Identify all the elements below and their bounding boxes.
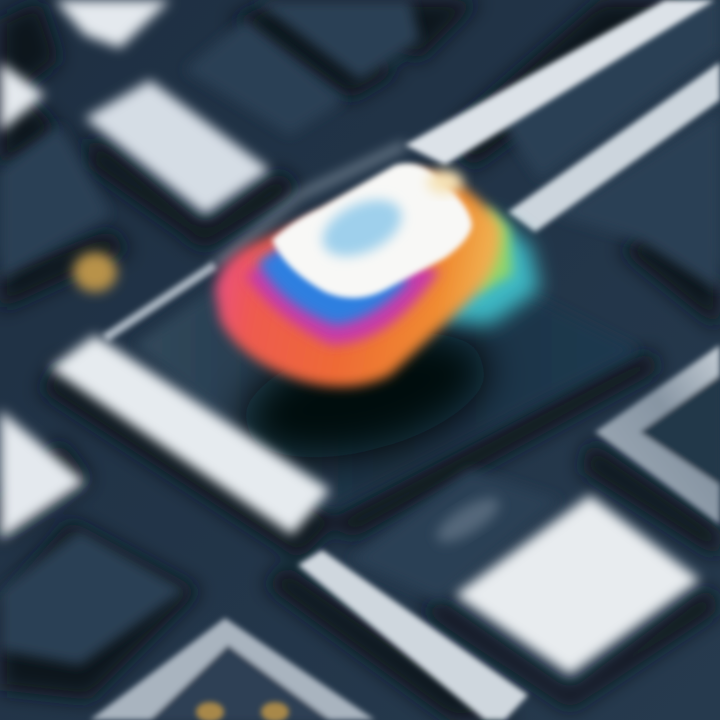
diagonal bar two [508, 62, 720, 232]
blue glyph [314, 188, 410, 268]
icon shadow [230, 310, 500, 480]
icon: amber dot [73, 252, 117, 292]
green rim [475, 205, 512, 295]
amber marks bottom [196, 702, 289, 720]
yellow highlight [427, 170, 463, 194]
key: top left [55, 0, 170, 48]
teal glow [440, 215, 540, 325]
key: bottom right [455, 495, 700, 675]
diagonal bar one [405, 0, 715, 165]
bottom device [90, 618, 375, 720]
phone outline upper segment [215, 145, 405, 265]
bottom bar [298, 550, 528, 720]
key: left edge [0, 62, 45, 132]
right device [595, 345, 720, 525]
rainbow body [215, 170, 501, 386]
phone bright edge [50, 335, 330, 535]
blue band [258, 235, 410, 325]
key: lower left [0, 410, 85, 540]
colorful app icon [215, 163, 540, 386]
phone screen [135, 235, 640, 510]
key: upper left [85, 80, 270, 215]
phone outline [105, 265, 215, 338]
keyboard legend smudge [431, 490, 505, 550]
white top [272, 163, 472, 298]
magenta band [245, 240, 440, 345]
